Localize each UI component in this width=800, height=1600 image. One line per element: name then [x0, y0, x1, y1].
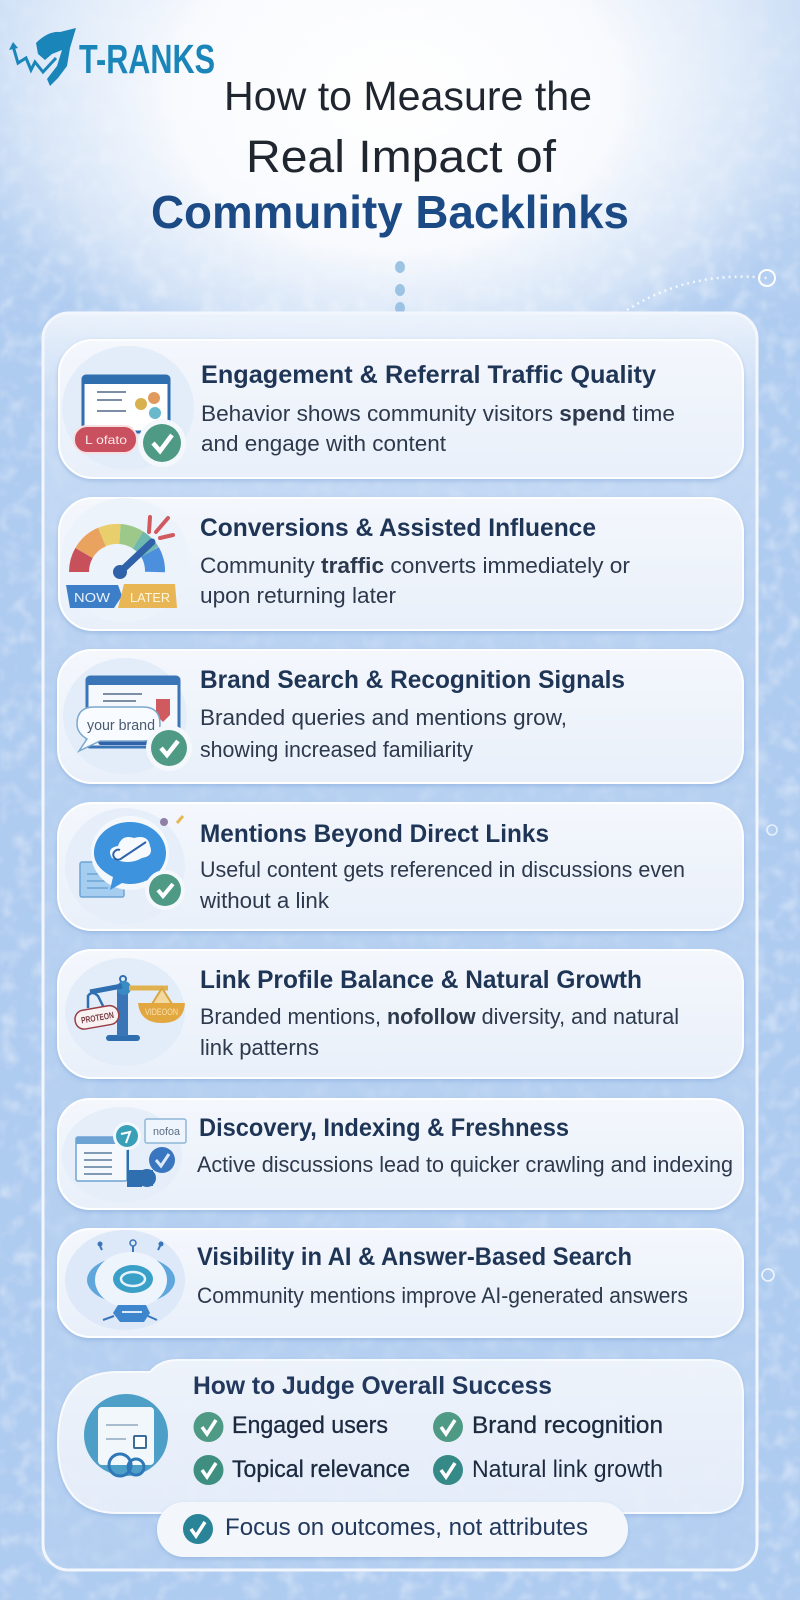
card: mentions: [58, 803, 743, 930]
card: brand search: [58, 650, 743, 783]
callout: focus on outcomes: Focus on outcomes, not attributes: [225, 1514, 588, 1541]
body text: [200, 1004, 679, 1060]
body text: link patterns: [200, 1035, 319, 1060]
icon: browser with your brand bubble: your brand: [87, 717, 155, 734]
title line 3: Community Backlinks: [151, 186, 629, 238]
icon: index panel and nofollow tag: [62, 1107, 186, 1203]
card: discovery: [58, 1099, 743, 1209]
body text: [200, 705, 567, 762]
heading: Conversions & Assisted Influence: [200, 514, 596, 542]
body text: [199, 857, 685, 913]
body text: and engage with content: [201, 431, 446, 456]
callout: focus on outcomes: [157, 1502, 628, 1557]
item: topical relevance: Topical relevance: [232, 1456, 410, 1483]
icon: speech bubble with link: [65, 808, 185, 924]
body text: upon returning later: [200, 583, 396, 608]
heading: Mentions Beyond Direct Links: [200, 820, 549, 848]
card: AI visibility: [58, 1229, 743, 1337]
item: engaged users: Engaged users: [232, 1412, 388, 1439]
icon: balance scale: PROTEON: [80, 1010, 115, 1026]
title: [151, 73, 629, 238]
heading: Visibility in AI & Answer-Based Search: [197, 1243, 632, 1271]
body text: Community mentions improve AI-generated answers: [197, 1283, 688, 1308]
body text: Useful content gets referenced in discussions even: [200, 857, 685, 882]
icon: browser globe: [84, 1394, 168, 1476]
panel: how to judge overall success: [58, 1360, 743, 1513]
panel: outer container: [43, 313, 757, 1570]
body text: without a link: [199, 888, 330, 913]
title line 2: Real Impact of: [246, 131, 557, 182]
icon: AI robot: [65, 1230, 185, 1330]
icon: balance scale: [65, 958, 185, 1066]
icon: index panel and nofollow tag: nofoa: [153, 1126, 181, 1138]
heading: Brand Search & Recognition Signals: [200, 666, 625, 694]
item: brand recognition: Brand recognition: [472, 1412, 663, 1439]
heading: Engagement & Referral Traffic Quality: [201, 361, 656, 389]
item: natural link growth: Natural link growth: [472, 1456, 663, 1483]
card: engagement: [59, 340, 743, 478]
body text: Branded mentions, nofollow diversity, and natural: [200, 1004, 679, 1029]
logo mark: [9, 28, 76, 86]
heading: How to Judge Overall Success: [193, 1372, 552, 1400]
body text: Active discussions lead to quicker crawling and indexing: [197, 1152, 733, 1177]
icon: gauge with now and later tags: [61, 498, 189, 622]
heading: Link Profile Balance & Natural Growth: [200, 966, 642, 994]
logo wordmark: T-RANKS: [79, 36, 215, 82]
icon: browser with check: [62, 346, 194, 470]
body text: [201, 401, 675, 456]
body text: showing increased familiarity: [200, 737, 473, 762]
heading: Discovery, Indexing & Freshness: [199, 1114, 569, 1142]
card: conversions: [59, 498, 743, 630]
title line 1: How to Measure the: [224, 73, 592, 119]
logo: T-RANKS: [9, 28, 215, 86]
body text: Community traffic converts immediately or: [200, 553, 630, 578]
body text: Behavior shows community visitors spend time: [201, 401, 675, 426]
body text: [200, 553, 630, 608]
icon: balance scale: VIDEOON: [145, 1007, 178, 1017]
icon: gauge with now and later tags: LATER: [130, 590, 170, 605]
icon: browser with check: L ofato: [85, 433, 127, 447]
card: link profile: [58, 950, 743, 1078]
icon: gauge with now and later tags: NOW: [74, 590, 111, 605]
icon: browser with your brand bubble: [63, 658, 192, 774]
body text: Branded queries and mentions grow,: [200, 705, 567, 730]
connector dots: [395, 261, 405, 314]
